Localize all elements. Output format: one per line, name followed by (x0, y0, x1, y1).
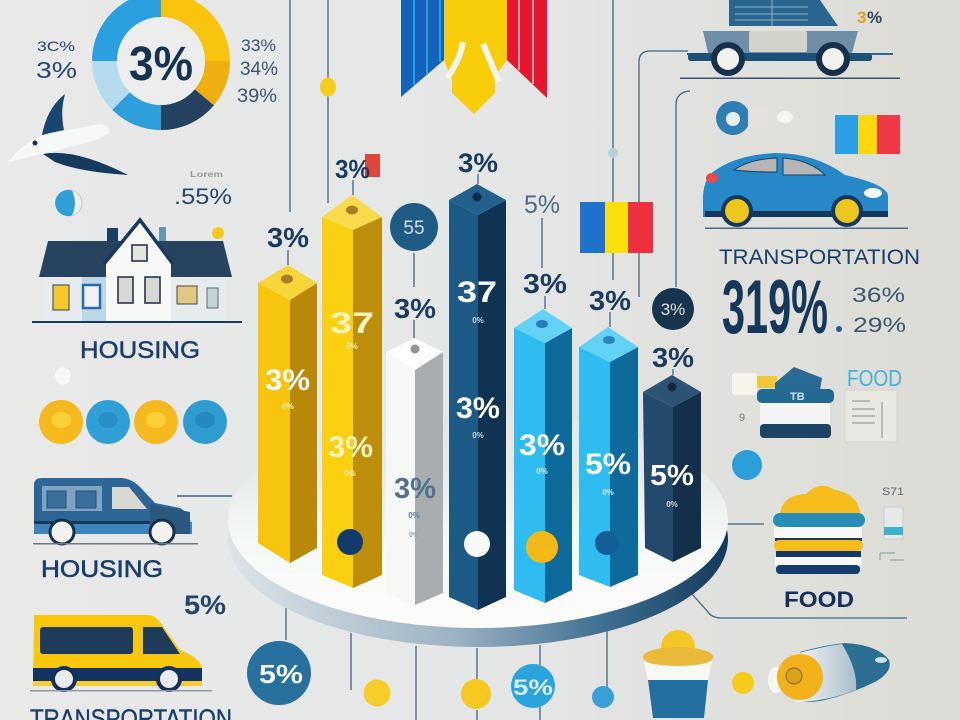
heading: transportation: TRANSPORTATION (719, 246, 920, 269)
value labels above bars: 3% (394, 293, 436, 324)
icon: food document: FOOD (847, 365, 902, 391)
icon: yellow coin right (732, 672, 754, 694)
bar 5: light blue (514, 309, 572, 603)
bar 6: light blue (579, 327, 638, 587)
bar 2: yellow: 37 (330, 307, 374, 340)
bar 1: yellow: 0% (282, 402, 294, 411)
badge: 5% large (247, 641, 311, 705)
icon: food stack (773, 486, 865, 574)
bar 4: navy (449, 184, 506, 610)
bar 6: light blue: 0% (602, 488, 614, 497)
secondary statistics: 36% (852, 284, 905, 307)
icon: blue van (33, 478, 198, 544)
flag centre (580, 202, 653, 253)
bar 6: light blue: 5% (585, 448, 631, 481)
bar 1: yellow (258, 265, 317, 563)
right donut percentages (237, 36, 278, 107)
value labels above bars: 3% (267, 222, 309, 253)
bar 4: navy: 0% (472, 316, 484, 325)
icon: yellow van (30, 615, 212, 692)
bar 7: dark navy (643, 375, 701, 562)
bar 4: navy: 3% (456, 392, 500, 425)
heading: housing: HOUSING (80, 337, 200, 364)
bar 2: yellow: 0% (346, 342, 358, 351)
icon: blue half circle (55, 190, 82, 216)
badge: 5% blue: 5% (513, 675, 553, 700)
icon: cup with coins (643, 630, 713, 718)
badge: 5% blue (511, 664, 555, 708)
small percentage note (174, 170, 232, 209)
bar 3: white (386, 338, 443, 605)
value labels above bars: 3% (589, 285, 631, 316)
bar 3: white: 3% (394, 473, 436, 505)
bar 1: yellow: 3% (265, 364, 310, 397)
secondary statistics: 29% (853, 314, 906, 337)
donut value: 3% (129, 38, 193, 91)
truck percentage (857, 8, 882, 27)
donut chart (92, 0, 230, 130)
badge: 3% dark: 3% (661, 300, 685, 319)
side notes: S71 (882, 486, 904, 498)
icon: truck (680, 0, 900, 79)
icon: food document (845, 365, 902, 442)
value labels above bars: 3% (335, 154, 370, 184)
truck percentage: % (867, 8, 882, 27)
small percentage note: Lorem (190, 170, 223, 179)
truck percentage: 3 (857, 8, 866, 27)
value labels above bars: 3% (652, 342, 694, 373)
percentage label 5%: 5% (184, 590, 226, 620)
dot on connector line (320, 78, 336, 96)
icon: airplane (8, 94, 128, 175)
right donut percentages: 34% (240, 59, 278, 80)
icon: blue car (703, 153, 908, 229)
platform (228, 412, 728, 647)
value labels above bars (267, 148, 694, 373)
right donut percentages: 39% (237, 86, 277, 107)
small percentage note: .55% (174, 184, 232, 209)
connector node (608, 148, 618, 158)
bar 4: navy: 37 (457, 276, 497, 309)
icon: stacked box: 9 (739, 412, 745, 424)
left donut percentages (36, 38, 77, 83)
bar 7: dark navy: 5% (650, 460, 694, 492)
left donut percentages: 3C% (37, 38, 75, 54)
secondary statistics (836, 284, 906, 337)
icon: blue circle (732, 450, 762, 480)
bar 5: light blue: 0% (536, 467, 548, 476)
badge: 55: 55 (403, 218, 425, 239)
badge: 55 (390, 203, 438, 251)
bar 5: light blue: 3% (519, 429, 565, 462)
icon: house (32, 220, 242, 323)
side notes (880, 486, 904, 560)
bar 3: white: 0% (408, 511, 420, 520)
heading: food: FOOD (784, 587, 854, 612)
badge: 5% large: 5% (259, 659, 303, 689)
bar 2: yellow: 0% (344, 469, 356, 478)
icon row: coins (39, 368, 227, 444)
flag right (835, 115, 900, 154)
icon: blue circle tag (716, 101, 793, 135)
badge: 3% dark (652, 288, 694, 330)
icon: stacked box: TB (790, 391, 805, 403)
left donut percentages: 3% (36, 57, 77, 83)
big statistic: 319% (722, 265, 828, 350)
right donut percentages: 33% (241, 36, 276, 55)
bar 2: yellow (322, 195, 382, 588)
bar 4: navy: 0% (472, 431, 484, 440)
icon: yellow coin (364, 680, 390, 706)
value labels above bars: 3% (458, 148, 498, 178)
bar 2: yellow: 3% (328, 431, 373, 464)
bar 3: white: 0% (409, 532, 420, 539)
icon: capsule (768, 643, 890, 702)
value labels above bars: 3% (523, 268, 567, 299)
ribbon with flag colours (401, 0, 547, 114)
bar 7: dark navy: 0% (666, 500, 678, 509)
icon: blue dot (592, 686, 614, 708)
heading: housing lower: HOUSING (41, 556, 163, 583)
value labels above bars: 5% (524, 191, 560, 219)
icon: stacked box (732, 367, 834, 438)
icon: yellow coin centre (461, 679, 491, 709)
